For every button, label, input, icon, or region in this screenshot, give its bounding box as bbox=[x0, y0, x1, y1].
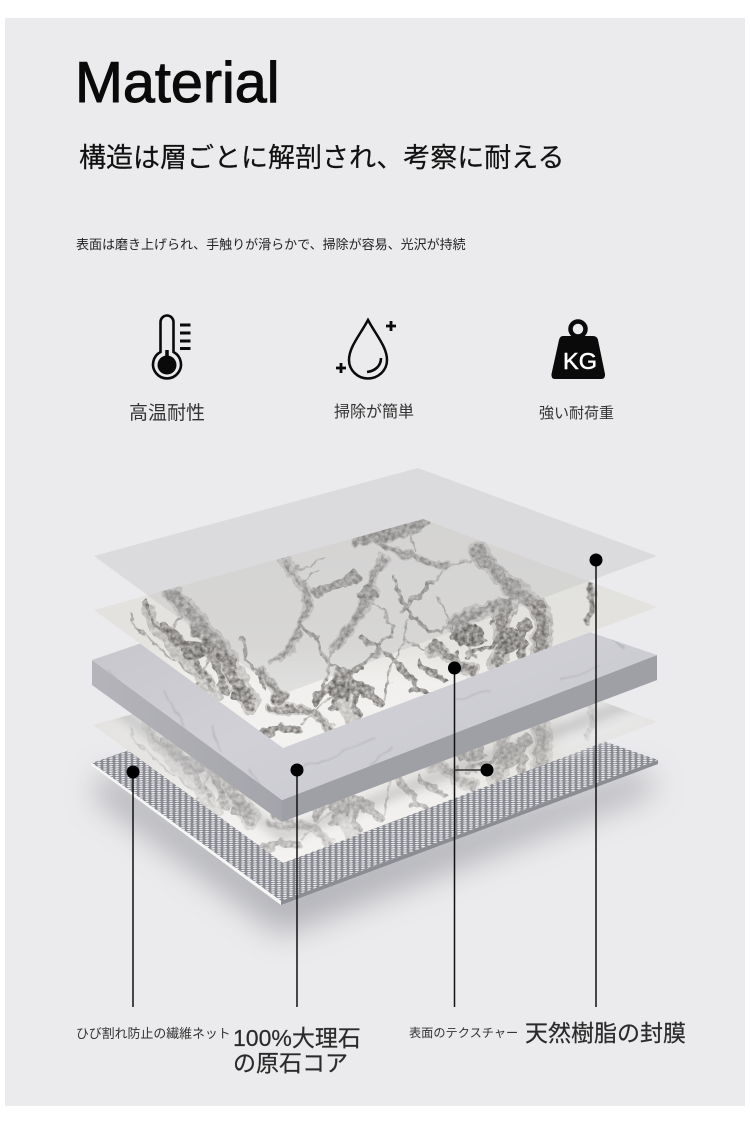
leader lines and dots bbox=[126, 554, 602, 1007]
description: 表面は磨き上げられ、手触りが滑らかで、掃除が容易、光沢が持続 bbox=[76, 237, 466, 252]
title: Material bbox=[75, 51, 280, 115]
layer: lower marble texture bbox=[94, 702, 656, 863]
label: heat resistance: 高温耐性 bbox=[129, 403, 205, 424]
icon: thermometer bbox=[153, 316, 190, 378]
label: fiber net: ひび割れ防止の繊維ネット bbox=[76, 1026, 231, 1041]
icon: kilogram weight: KG bbox=[563, 348, 597, 374]
layer: transparent resin film bbox=[94, 468, 657, 694]
icon: water drop bbox=[336, 320, 396, 378]
label: resin film: 天然樹脂の封膜 bbox=[525, 1020, 686, 1046]
layer: upper marble surface bbox=[94, 519, 657, 748]
label: marble core bbox=[233, 1025, 361, 1076]
shadow under layers bbox=[92, 770, 658, 935]
label: marble core: 100%大理石 bbox=[233, 1025, 361, 1051]
label: easy to clean: 掃除が簡単 bbox=[334, 404, 414, 421]
layer: marble core slab bbox=[92, 632, 657, 822]
icon: kilogram weight bbox=[551, 322, 605, 379]
label: marble core: の原石コア bbox=[233, 1050, 348, 1076]
label: surface texture: 表面のテクスチャー bbox=[409, 1026, 518, 1040]
layer: fiber mesh net bbox=[91, 663, 658, 905]
subtitle: 構造は層ごとに解剖され、考察に耐える bbox=[79, 143, 564, 173]
shadow of slab on lower marble bbox=[117, 704, 630, 843]
label: strong load bearing: 強い耐荷重 bbox=[539, 405, 614, 422]
